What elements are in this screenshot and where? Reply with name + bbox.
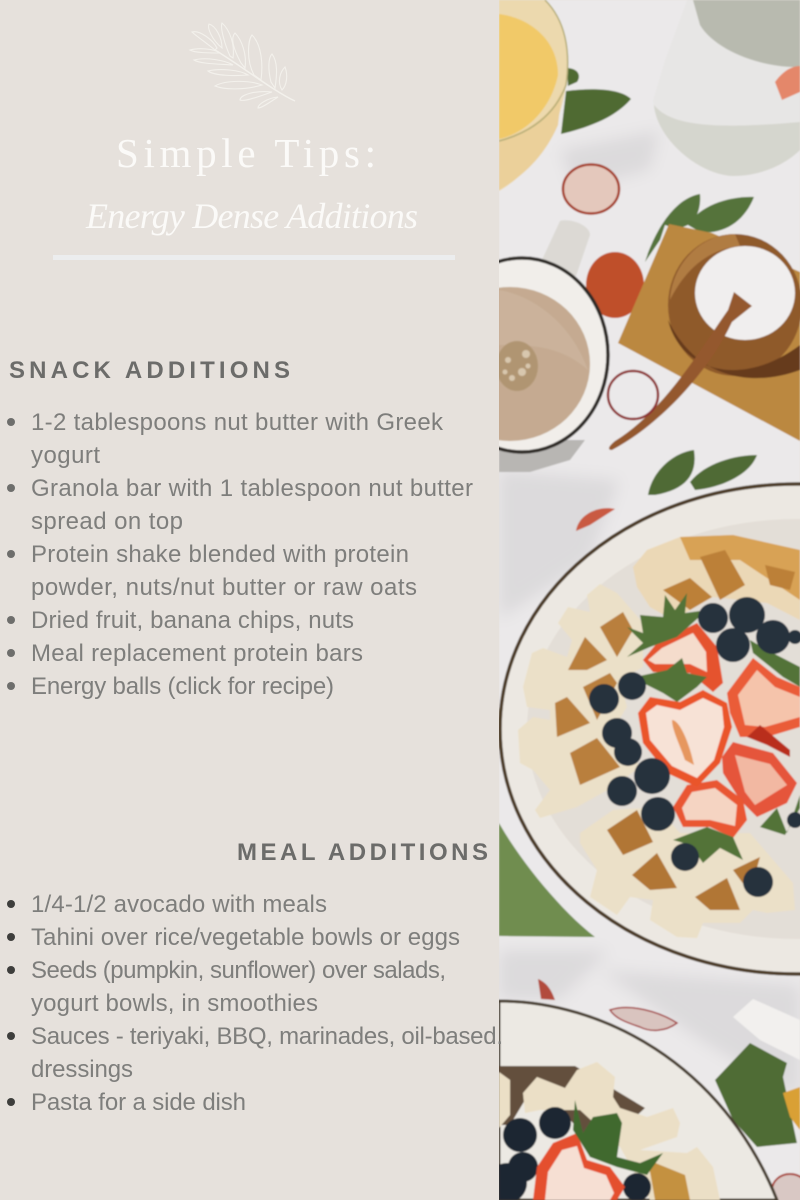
list: meal additions: Tahini over rice/vegetable bowls or eggs xyxy=(31,924,460,951)
plate xyxy=(499,1001,777,1200)
strawberries xyxy=(638,623,800,838)
list: meal additions: Sauces - teriyaki, BBQ, marinades, oil-based. xyxy=(31,1023,503,1050)
green leaf print xyxy=(499,823,595,937)
basil xyxy=(573,1100,663,1175)
list: snack additions: powder, nuts/nut butter or raw oats xyxy=(31,574,417,601)
blueberries xyxy=(589,597,800,897)
white handle xyxy=(733,999,800,1060)
wooden spoon xyxy=(609,292,752,450)
waffle: top xyxy=(633,535,800,620)
list: meal additions: dressings xyxy=(31,1056,133,1083)
red apple print xyxy=(586,252,644,318)
list: meal additions: Seeds (pumpkin, sunflower) over salads, xyxy=(31,957,446,984)
title line: Simple Tips: Simple Tips: xyxy=(116,130,376,176)
red ring print 1 xyxy=(563,164,619,214)
plate xyxy=(500,484,800,974)
cup handle xyxy=(541,220,590,276)
heading: meal additions: MEAL ADDITIONS xyxy=(237,839,488,866)
waffle: bottom xyxy=(580,807,795,938)
list: meal additions: 1/4-1/2 avocado with meals xyxy=(31,891,327,918)
leaves above board xyxy=(645,194,754,262)
red leaf print xyxy=(576,508,615,531)
photo: breakfast table xyxy=(499,0,800,1200)
list: snack additions: Granola bar with 1 tablespoon nut butter xyxy=(31,475,473,502)
heading: snack additions: SNACK ADDITIONS xyxy=(9,357,290,384)
panel: text background xyxy=(0,0,499,1200)
syrup xyxy=(499,1065,646,1134)
list: snack additions: yogurt xyxy=(31,442,100,469)
green leaf print bottom right xyxy=(715,1043,797,1147)
water glass xyxy=(653,0,800,176)
red leaf outlines xyxy=(538,979,677,1030)
list: snack additions: Protein shake blended with protein xyxy=(31,541,409,568)
title xyxy=(85,130,418,236)
coffee cup xyxy=(499,220,611,472)
title underline xyxy=(53,255,455,260)
leaves below board xyxy=(648,450,757,495)
icon: white leaf sprig xyxy=(190,23,295,108)
red ring print 2 xyxy=(608,371,658,419)
list: meal additions: yogurt bowls, in smoothies xyxy=(31,990,318,1017)
icon: green leaves beside juice glass xyxy=(561,68,631,134)
list: snack additions: Meal replacement protein bars xyxy=(31,640,363,667)
blueberries xyxy=(487,1107,651,1200)
waffle: left xyxy=(518,584,643,818)
strawberry stems xyxy=(627,593,800,863)
list: meal additions: Pasta for a side dish xyxy=(31,1089,246,1116)
subtitle script line: Energy Dense Additions xyxy=(85,196,418,236)
plate with waffles xyxy=(500,484,800,974)
wooden board xyxy=(618,224,800,441)
juice glass xyxy=(499,0,568,191)
tablecloth xyxy=(499,0,800,1200)
list: snack additions: spread on top xyxy=(31,508,183,535)
strawberry xyxy=(533,1133,625,1200)
wooden bowl xyxy=(668,234,800,378)
waffle pieces xyxy=(523,1062,720,1200)
sugar xyxy=(695,246,795,340)
list: snack additions: Energy balls (click for recipe) xyxy=(31,673,334,700)
lower plate with waffle xyxy=(487,1001,777,1200)
cloth shadows xyxy=(499,130,800,1100)
list: snack additions: 1-2 tablespoons nut butter with Greek xyxy=(31,409,444,436)
foam xyxy=(496,341,538,391)
list: meal additions xyxy=(7,891,503,1116)
list: snack additions: Dried fruit, banana chips, nuts xyxy=(31,607,354,634)
list: snack additions xyxy=(7,409,473,700)
